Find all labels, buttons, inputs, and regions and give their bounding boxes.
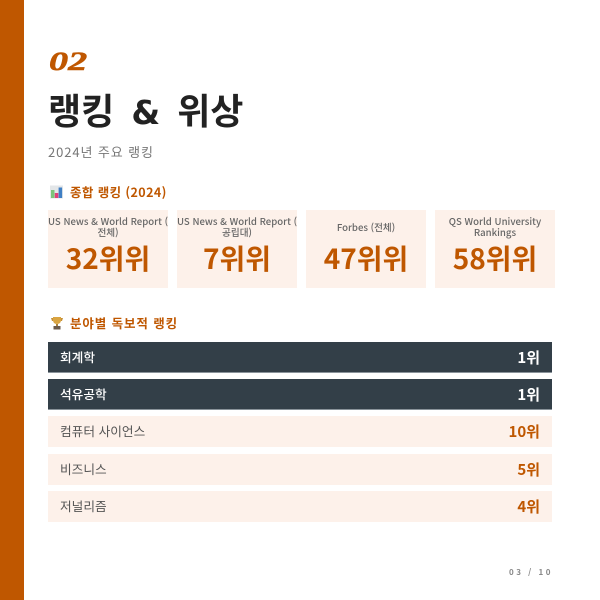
page number: 03 / 10: [509, 567, 553, 578]
card: QS: 58위위: [453, 238, 537, 278]
card: Forbes: Forbes (전체): [337, 220, 395, 234]
icon: bar chart: [50, 186, 63, 198]
heading text: 분야별 독보적 랭킹: [70, 313, 178, 332]
row: petroleum engineering: [48, 379, 552, 410]
card: Forbes: [306, 210, 426, 288]
card: US News overall: [48, 210, 168, 288]
heading: overall ranking: [50, 182, 167, 201]
row: accounting: [48, 342, 552, 373]
row: computer science: 10위: [508, 421, 540, 442]
row: accounting: 1위: [517, 347, 540, 368]
row: journalism: 저널리즘: [60, 496, 107, 515]
row: journalism: 4위: [517, 496, 540, 517]
row: petroleum engineering: 1위: [517, 384, 540, 405]
card: US News public: 7위위: [203, 238, 271, 278]
row: accounting: 회계학: [60, 347, 95, 366]
card: Forbes: 47위위: [324, 238, 408, 278]
row: business: 5위: [517, 459, 540, 480]
panel: overall ranking cards: [48, 210, 555, 288]
panel: field ranking table: [48, 342, 552, 522]
card: US News public: US News & World Report (: [177, 214, 297, 228]
icon: trophy: [51, 317, 63, 330]
title: 랭킹 & 위상: [48, 83, 243, 135]
card: US News overall: US News & World Report (: [48, 214, 168, 228]
row: business: 비즈니스: [60, 459, 107, 478]
card: US News overall: 32위위: [66, 238, 150, 278]
heading text: 종합 랭킹 (2024): [70, 182, 167, 201]
card: QS: [435, 210, 555, 288]
subtitle: 2024년 주요 랭킹: [48, 142, 154, 161]
section number: 02: [49, 47, 87, 76]
row: computer science: [48, 416, 552, 447]
left accent bar: [0, 0, 24, 600]
row: computer science: 컴퓨터 사이언스: [60, 421, 145, 440]
row: business: [48, 454, 552, 485]
card: QS: Rankings: [474, 225, 516, 239]
row: journalism: [48, 491, 552, 522]
card: US News public: [177, 210, 297, 288]
card: QS: QS World University: [449, 214, 541, 228]
card: US News public: 공립대): [222, 225, 252, 239]
card: US News overall: 전체): [97, 225, 119, 239]
row: petroleum engineering: 석유공학: [60, 384, 107, 403]
heading: field rankings: [51, 313, 178, 332]
